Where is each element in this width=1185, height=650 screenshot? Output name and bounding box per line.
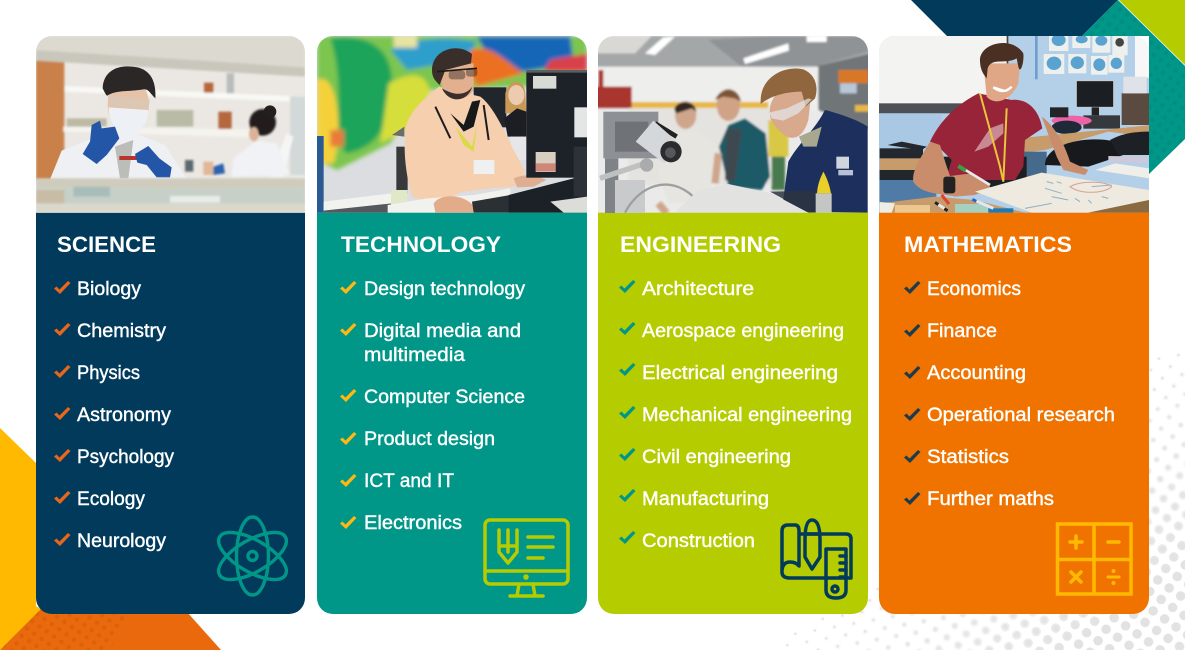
engineering heading: ENGINEERING xyxy=(620,232,781,257)
mathematics list: Economics xyxy=(927,279,1021,300)
background: orange bottom shape xyxy=(0,608,221,650)
technology list: Digital media and xyxy=(364,321,521,342)
engineering list: Aerospace engineering xyxy=(642,321,844,342)
photo: engineering students at machine xyxy=(595,36,872,213)
technology card background xyxy=(317,200,587,614)
mathematics list: Finance xyxy=(927,321,997,342)
background: teal corner shape xyxy=(1082,0,1185,174)
science list: Neurology xyxy=(77,531,167,552)
technology heading: TECHNOLOGY xyxy=(341,232,501,257)
engineering list: Construction xyxy=(642,531,755,552)
panel: science xyxy=(36,36,305,614)
engineering list: Electrical engineering xyxy=(642,363,838,384)
photo: student at computer xyxy=(317,36,587,213)
icon: calculator symbols xyxy=(1058,524,1131,594)
engineering list xyxy=(619,279,852,552)
science list xyxy=(54,279,174,552)
technology list xyxy=(340,279,526,534)
science card background xyxy=(36,200,305,614)
photo: smiling student with whiteboard sheet xyxy=(875,34,1152,213)
science list: Physics xyxy=(77,363,140,384)
science heading: SCIENCE xyxy=(57,232,156,257)
icon: computer with pencil xyxy=(485,520,568,596)
icon: blueprint, pencil and ruler xyxy=(782,520,851,598)
technology list: Design technology xyxy=(364,279,526,300)
technology list: ICT and IT xyxy=(364,471,454,492)
background: lime corner shape xyxy=(1119,0,1185,65)
mathematics list: Operational research xyxy=(927,405,1115,426)
mathematics card background xyxy=(879,200,1149,614)
science list: Psychology xyxy=(77,447,174,468)
mathematics heading: MATHEMATICS xyxy=(904,232,1072,257)
engineering list: Architecture xyxy=(642,279,754,300)
technology list: Computer Science xyxy=(364,387,525,408)
mathematics list: Further maths xyxy=(927,489,1054,510)
background: navy corner shape xyxy=(911,0,1118,36)
engineering list: Manufacturing xyxy=(642,489,769,510)
mathematics list xyxy=(904,279,1115,510)
engineering list: Mechanical engineering xyxy=(642,405,852,426)
science list: Biology xyxy=(77,279,142,300)
panel: mathematics xyxy=(875,34,1152,614)
science list: Chemistry xyxy=(77,321,167,342)
technology list: multimedia xyxy=(364,345,465,366)
panel: engineering xyxy=(595,36,872,614)
technology list: Product design xyxy=(364,429,495,450)
technology list: Electronics xyxy=(364,513,462,534)
engineering card background xyxy=(598,200,868,614)
icon: atom xyxy=(212,517,293,595)
science list: Astronomy xyxy=(77,405,172,426)
panel: technology xyxy=(317,36,587,614)
mathematics list: Statistics xyxy=(927,447,1009,468)
mathematics list: Accounting xyxy=(927,363,1026,384)
engineering list: Civil engineering xyxy=(642,447,791,468)
science list: Ecology xyxy=(77,489,145,510)
background: halftone dots xyxy=(770,335,1185,650)
background: yellow left shape xyxy=(0,428,42,650)
photo: scientist in laboratory xyxy=(36,36,305,213)
